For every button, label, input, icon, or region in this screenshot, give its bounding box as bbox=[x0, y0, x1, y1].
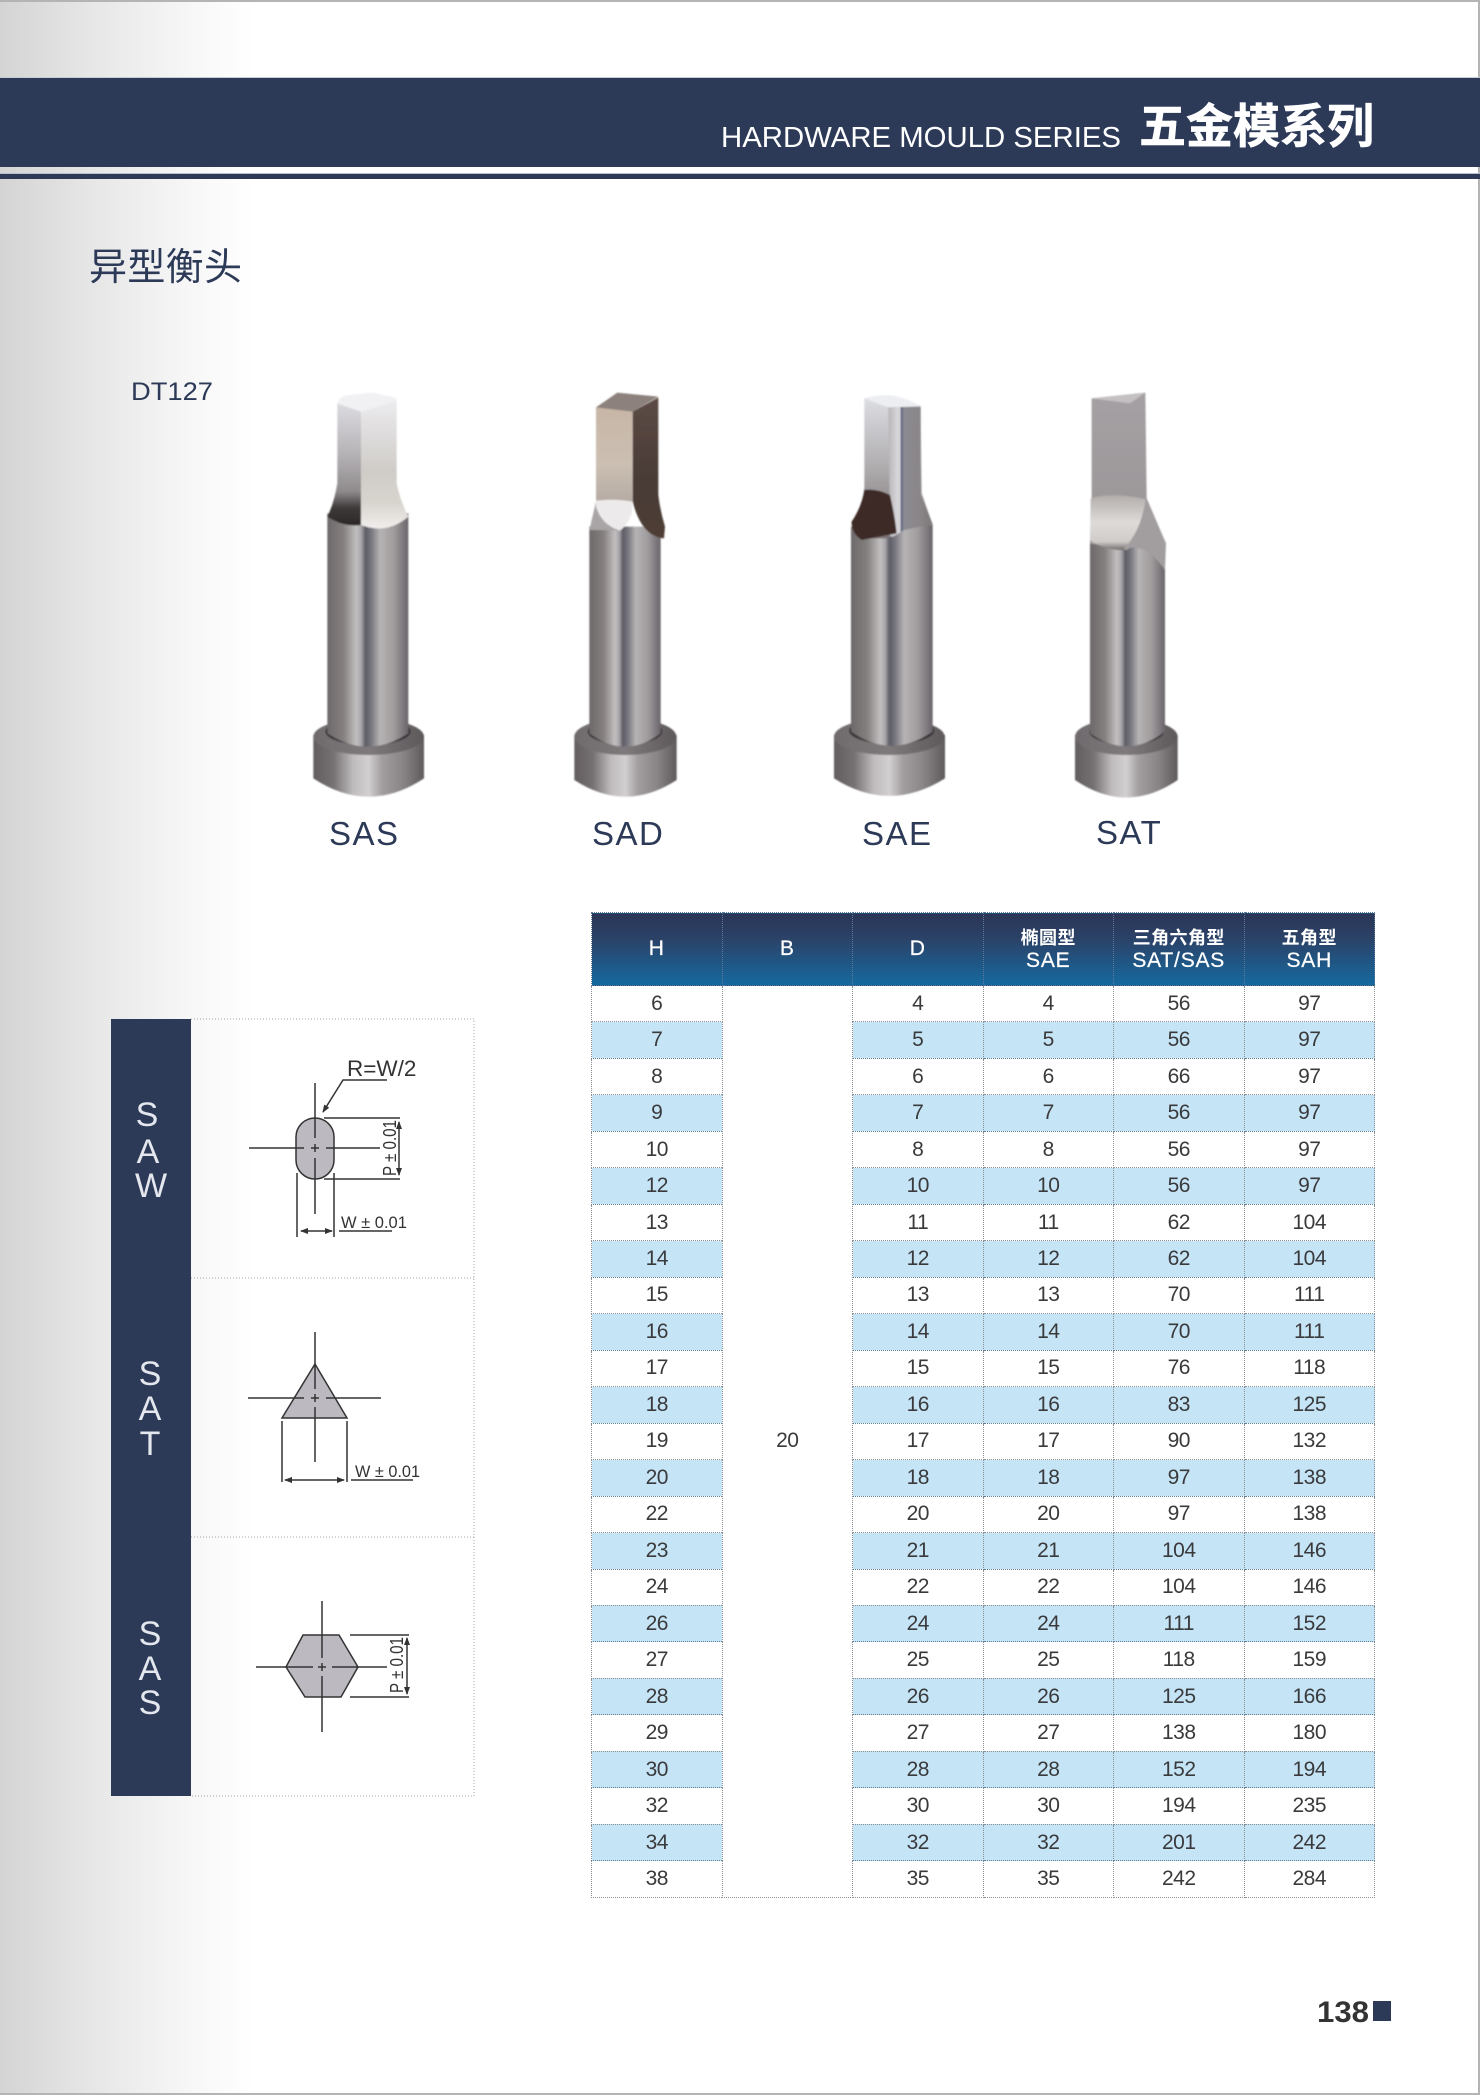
table body: 28 bbox=[1037, 1758, 1059, 1781]
table body: 201 bbox=[1162, 1831, 1196, 1854]
table body: 10 bbox=[1037, 1174, 1059, 1197]
panel: dark label column bbox=[111, 1019, 191, 1796]
table body: 146 bbox=[1292, 1575, 1326, 1598]
specification table bbox=[591, 912, 1375, 1898]
table body: 56 bbox=[1168, 1174, 1190, 1197]
table body: 26 bbox=[907, 1685, 929, 1708]
table body: 8 bbox=[912, 1138, 923, 1161]
table body: 22 bbox=[907, 1575, 929, 1598]
table body: 32 bbox=[907, 1831, 929, 1854]
table body: 30 bbox=[907, 1794, 929, 1817]
table body: 32 bbox=[646, 1794, 668, 1817]
label: SAS: A bbox=[139, 1650, 162, 1688]
table body: 138 bbox=[1162, 1721, 1196, 1744]
punch photo: SAS bbox=[313, 393, 424, 797]
table body: 166 bbox=[1292, 1685, 1326, 1708]
table body: 118 bbox=[1163, 1648, 1195, 1671]
table header: SAH bbox=[1286, 949, 1332, 972]
table body: 24 bbox=[1037, 1612, 1059, 1635]
table body: 12 bbox=[1037, 1247, 1059, 1270]
label: SAW bbox=[135, 1096, 167, 1205]
table body: 138 bbox=[1292, 1502, 1326, 1525]
product label: SAE: SAE bbox=[862, 815, 933, 852]
table body: 90 bbox=[1168, 1429, 1190, 1452]
table body: 97 bbox=[1168, 1466, 1190, 1489]
product label: SAD: SAD bbox=[592, 815, 664, 852]
table body: 56 bbox=[1168, 1028, 1190, 1051]
table body: 104 bbox=[1292, 1211, 1326, 1234]
table body: 38 bbox=[646, 1867, 668, 1890]
diagram: SAW oval section: P ± 0.01 bbox=[380, 1120, 400, 1176]
table body: 20 bbox=[776, 1429, 798, 1452]
table body: 20 bbox=[646, 1466, 668, 1489]
punch photo: SAE bbox=[834, 395, 945, 796]
table body: 30 bbox=[646, 1758, 668, 1781]
table body: 284 bbox=[1292, 1867, 1326, 1890]
table body: 56 bbox=[1168, 1138, 1190, 1161]
table body: 9 bbox=[651, 1101, 662, 1124]
table body: 32 bbox=[1037, 1831, 1059, 1854]
table body: 34 bbox=[646, 1831, 668, 1854]
table body: 7 bbox=[651, 1028, 662, 1051]
panel: cross-section frame bbox=[191, 1019, 474, 1796]
table body: 28 bbox=[907, 1758, 929, 1781]
table body: 62 bbox=[1168, 1247, 1190, 1270]
table body: 18 bbox=[1037, 1466, 1059, 1489]
table body: 20 bbox=[907, 1502, 929, 1525]
table body: 25 bbox=[1037, 1648, 1059, 1671]
table body: 97 bbox=[1298, 992, 1320, 1015]
table body: 18 bbox=[907, 1466, 929, 1489]
label: SAW: W bbox=[135, 1167, 167, 1205]
table body: 17 bbox=[1037, 1429, 1059, 1452]
table body: 26 bbox=[646, 1612, 668, 1635]
diagram: SAW oval section: R=W/2 bbox=[347, 1056, 416, 1081]
table body: 97 bbox=[1298, 1028, 1320, 1051]
table body: 97 bbox=[1298, 1101, 1320, 1124]
table body: 16 bbox=[1037, 1393, 1059, 1416]
table body: 35 bbox=[1037, 1867, 1059, 1890]
table body: 35 bbox=[907, 1867, 929, 1890]
table body: 56 bbox=[1168, 1101, 1190, 1124]
table body: 17 bbox=[646, 1356, 668, 1379]
table body: 7 bbox=[912, 1101, 923, 1124]
table body: 111 bbox=[1164, 1612, 1194, 1635]
table body: 16 bbox=[907, 1393, 929, 1416]
table body: 152 bbox=[1292, 1612, 1326, 1635]
label: SAT: T bbox=[140, 1425, 160, 1463]
table header: SAT/SAS bbox=[1132, 949, 1225, 972]
table body: 138 bbox=[1292, 1466, 1326, 1489]
table body: 24 bbox=[646, 1575, 668, 1598]
table body: 6 bbox=[1043, 1065, 1054, 1088]
table body: 8 bbox=[1043, 1138, 1054, 1161]
table body: 125 bbox=[1162, 1685, 1196, 1708]
table body: 125 bbox=[1292, 1393, 1326, 1416]
section heading: 异型衡头 bbox=[89, 247, 242, 289]
table body: 27 bbox=[1037, 1721, 1059, 1744]
table body: 11 bbox=[1038, 1211, 1059, 1234]
table body: 22 bbox=[1037, 1575, 1059, 1598]
page background gradient bbox=[0, 0, 254, 2095]
table body: 97 bbox=[1298, 1174, 1320, 1197]
table body: 242 bbox=[1292, 1831, 1326, 1854]
table body: 6 bbox=[912, 1065, 923, 1088]
table body: 194 bbox=[1162, 1794, 1196, 1817]
table body: 12 bbox=[646, 1174, 668, 1197]
table body: 4 bbox=[1043, 992, 1054, 1015]
table body: 104 bbox=[1162, 1539, 1196, 1562]
table body: 104 bbox=[1292, 1247, 1326, 1270]
punch photo: SAD bbox=[574, 393, 677, 797]
table header: 三角六角型 bbox=[1133, 924, 1225, 950]
table body: 83 bbox=[1168, 1393, 1190, 1416]
table body: 104 bbox=[1162, 1575, 1196, 1598]
table body: 62 bbox=[1168, 1211, 1190, 1234]
table body: 12 bbox=[907, 1247, 929, 1270]
label: SAT bbox=[139, 1355, 162, 1463]
table body: 111 bbox=[1294, 1320, 1324, 1343]
table body: 11 bbox=[907, 1211, 928, 1234]
table body: 22 bbox=[646, 1502, 668, 1525]
table body: 21 bbox=[907, 1539, 929, 1562]
table body: 26 bbox=[1037, 1685, 1059, 1708]
table body: 159 bbox=[1292, 1648, 1326, 1671]
table body: 20 bbox=[1037, 1502, 1059, 1525]
table body: 17 bbox=[907, 1429, 929, 1452]
table body: 13 bbox=[1037, 1283, 1059, 1306]
table body: 6 bbox=[651, 992, 662, 1015]
product label: SAS: SAS bbox=[329, 815, 400, 852]
table body: 70 bbox=[1168, 1283, 1190, 1306]
label: SAW: A bbox=[137, 1133, 160, 1171]
diagram: SAT triangle section: W ± 0.01 bbox=[355, 1462, 420, 1481]
table header: 椭圆型 bbox=[1021, 924, 1076, 950]
table body: 13 bbox=[646, 1211, 668, 1234]
table body: 4 bbox=[912, 992, 923, 1015]
label: SAS: S bbox=[139, 1684, 161, 1722]
table body: 14 bbox=[907, 1320, 929, 1343]
table body: 14 bbox=[646, 1247, 668, 1270]
table body: 97 bbox=[1168, 1502, 1190, 1525]
table body: 7 bbox=[1043, 1101, 1054, 1124]
diagram: SAS hexagon section bbox=[256, 1601, 409, 1732]
table body: 19 bbox=[646, 1429, 668, 1452]
label: SAT: S bbox=[139, 1355, 161, 1393]
diagram: SAS hexagon section: P ± 0.01 bbox=[387, 1637, 407, 1693]
table body: 76 bbox=[1168, 1356, 1190, 1379]
table header: B bbox=[780, 937, 795, 960]
table body: 27 bbox=[646, 1648, 668, 1671]
table body: 111 bbox=[1294, 1283, 1324, 1306]
model code: DT127 bbox=[131, 378, 213, 406]
table body: 30 bbox=[1037, 1794, 1059, 1817]
table header bbox=[592, 913, 1375, 986]
label: SAS bbox=[139, 1615, 162, 1722]
table body: 15 bbox=[1037, 1356, 1059, 1379]
table body: 146 bbox=[1292, 1539, 1326, 1562]
table body: 97 bbox=[1298, 1065, 1320, 1088]
header band bbox=[0, 77, 1480, 179]
diagram: SAW oval section: W ± 0.01 bbox=[341, 1214, 407, 1232]
punch photo: SAT bbox=[1075, 393, 1178, 797]
table body: 56 bbox=[1168, 992, 1190, 1015]
header chinese title: 五金模系列 bbox=[1139, 100, 1374, 153]
table body: 10 bbox=[907, 1174, 929, 1197]
table body: 24 bbox=[907, 1612, 929, 1635]
product label: SAT: SAT bbox=[1096, 814, 1162, 851]
header english title: HARDWARE MOULD SERIES bbox=[721, 122, 1121, 154]
page number: 138 bbox=[1317, 1996, 1369, 2029]
table body: 70 bbox=[1168, 1320, 1190, 1343]
table body: 14 bbox=[1037, 1320, 1059, 1343]
table body: 235 bbox=[1292, 1794, 1326, 1817]
table body: 25 bbox=[907, 1648, 929, 1671]
table body: 152 bbox=[1162, 1758, 1196, 1781]
table body: 28 bbox=[646, 1685, 668, 1708]
label: SAW: S bbox=[136, 1096, 158, 1134]
table header: D bbox=[910, 937, 926, 960]
table body: 15 bbox=[646, 1283, 668, 1306]
label: SAT: A bbox=[139, 1390, 162, 1428]
diagram: SAT triangle section bbox=[248, 1332, 420, 1482]
table body: 5 bbox=[1043, 1028, 1054, 1051]
table body: 118 bbox=[1293, 1356, 1325, 1379]
table header: 五角型 bbox=[1282, 924, 1337, 950]
table body: 5 bbox=[912, 1028, 923, 1051]
table body: 27 bbox=[907, 1721, 929, 1744]
table body: 10 bbox=[646, 1138, 668, 1161]
table body: 66 bbox=[1168, 1065, 1190, 1088]
page number marker bbox=[1373, 2001, 1391, 2021]
table body: 13 bbox=[907, 1283, 929, 1306]
table body: 16 bbox=[646, 1320, 668, 1343]
table header: SAE bbox=[1026, 949, 1070, 972]
table body: 97 bbox=[1298, 1138, 1320, 1161]
table body: 8 bbox=[651, 1065, 662, 1088]
table body: 23 bbox=[646, 1539, 668, 1562]
table body: 194 bbox=[1292, 1758, 1326, 1781]
diagram: SAW oval section bbox=[249, 1056, 416, 1237]
table body bbox=[592, 992, 1375, 1890]
table body: 180 bbox=[1292, 1721, 1326, 1744]
table body: 132 bbox=[1292, 1429, 1326, 1452]
label: SAS: S bbox=[139, 1615, 161, 1653]
table body: 18 bbox=[646, 1393, 668, 1416]
table body: 15 bbox=[907, 1356, 929, 1379]
table body: 29 bbox=[646, 1721, 668, 1744]
table body: 242 bbox=[1162, 1867, 1196, 1890]
table header: H bbox=[649, 937, 665, 960]
table body: 21 bbox=[1037, 1539, 1059, 1562]
